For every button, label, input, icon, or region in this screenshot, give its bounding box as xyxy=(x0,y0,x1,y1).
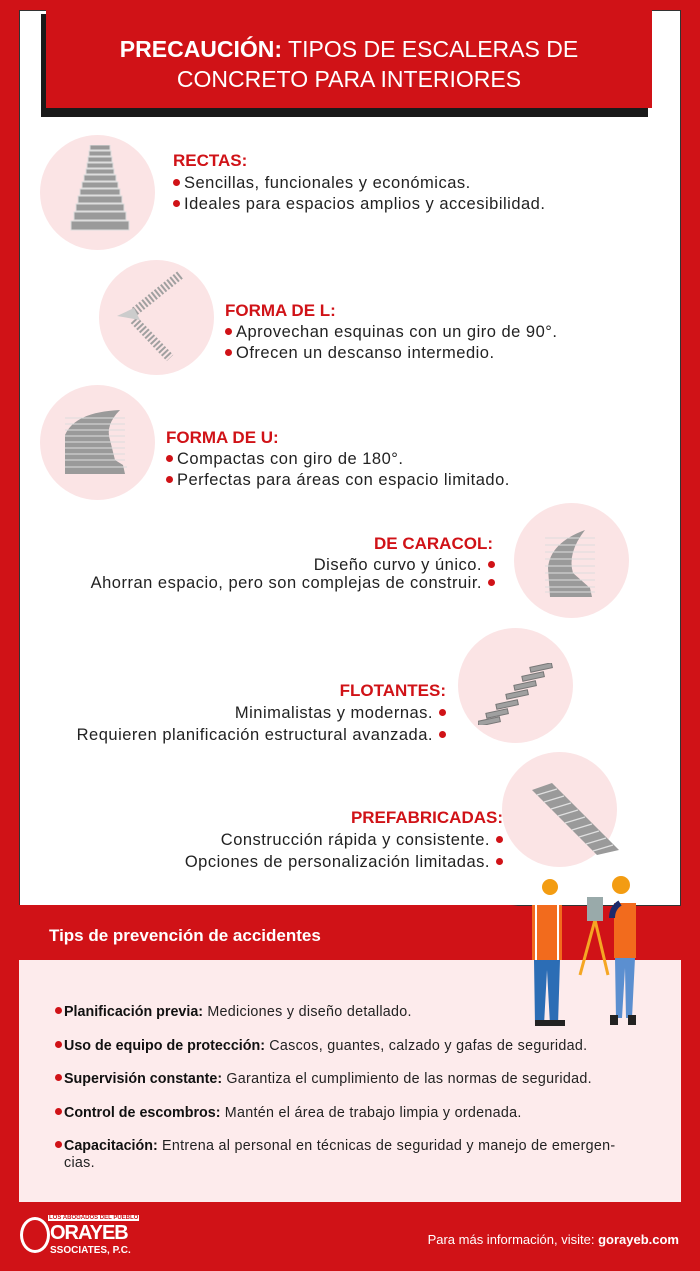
text: forma de U: Perfectas para áreas con espacio limitado. xyxy=(177,471,510,489)
footer logo: SSOCIATES, P.C. xyxy=(50,1245,131,1256)
text: flotantes: FLOTANTES: xyxy=(340,681,446,700)
text: forma de U: FORMA DE U: xyxy=(166,428,279,447)
text: forma de L: FORMA DE L: xyxy=(225,301,336,320)
footer logo: ORAYEB xyxy=(50,1222,128,1244)
icon: U stairs xyxy=(40,385,155,500)
text: CONCRETO PARA INTERIORES xyxy=(177,66,521,92)
text: flotantes: Requieren planificación estructural avanzada. xyxy=(77,726,433,744)
icon: spiral stairs xyxy=(514,503,629,618)
tips list: Supervisión constante: Garantiza el cumplimiento de las normas de seguridad. xyxy=(64,1071,592,1087)
tips list: Control de escombros: Mantén el área de trabajo limpia y ordenada. xyxy=(64,1105,522,1121)
text: prefabricadas: Opciones de personalización limitadas. xyxy=(185,853,490,871)
tips list: cias. xyxy=(64,1155,95,1171)
footer link: Para más información, visite: gorayeb.com xyxy=(428,1232,679,1247)
icon: L stairs xyxy=(99,260,214,375)
illustration: workers xyxy=(532,876,636,1026)
text: rectas: Ideales para espacios amplios y accesibilidad. xyxy=(184,195,545,213)
title banner xyxy=(41,14,648,117)
icon: floating stairs xyxy=(458,628,573,743)
text: PRECAUCIÓN: TIPOS DE ESCALERAS DE xyxy=(120,36,578,62)
text: rectas: RECTAS: xyxy=(173,151,247,170)
tips list: Capacitación: Entrena al personal en técnicas de seguridad y manejo de emergen- xyxy=(64,1138,615,1154)
icon: straight stairs xyxy=(40,135,155,250)
footer logo: LOS ABOGADOS DEL PUEBLO xyxy=(49,1215,138,1221)
tips header band xyxy=(19,905,549,961)
text: caracol: DE CARACOL: xyxy=(374,534,493,553)
tips heading: Tips de prevención de accidentes xyxy=(49,926,321,945)
text: caracol: Ahorran espacio, pero son complejas de construir. xyxy=(91,574,482,592)
text: forma de L: Ofrecen un descanso intermedio. xyxy=(236,344,495,362)
white panel xyxy=(19,10,681,906)
text: rectas: Sencillas, funcionales y económicas. xyxy=(184,174,471,192)
text: caracol: Diseño curvo y único. xyxy=(314,556,482,574)
tips list: Uso de equipo de protección: Cascos, guantes, calzado y gafas de seguridad. xyxy=(64,1038,587,1054)
text: prefabricadas: PREFABRICADAS: xyxy=(351,808,503,827)
text: flotantes: Minimalistas y modernas. xyxy=(235,704,433,722)
tips list: Planificación previa: Mediciones y diseño detallado. xyxy=(64,1004,412,1020)
text: forma de L: Aprovechan esquinas con un giro de 90°. xyxy=(236,323,557,341)
icon: prefab stairs xyxy=(502,752,617,867)
tips list xyxy=(55,1004,615,1171)
text: forma de U: Compactas con giro de 180°. xyxy=(177,450,403,468)
tips panel xyxy=(19,960,681,1202)
text: prefabricadas: Construcción rápida y consistente. xyxy=(221,831,490,849)
footer logo xyxy=(20,1215,139,1256)
